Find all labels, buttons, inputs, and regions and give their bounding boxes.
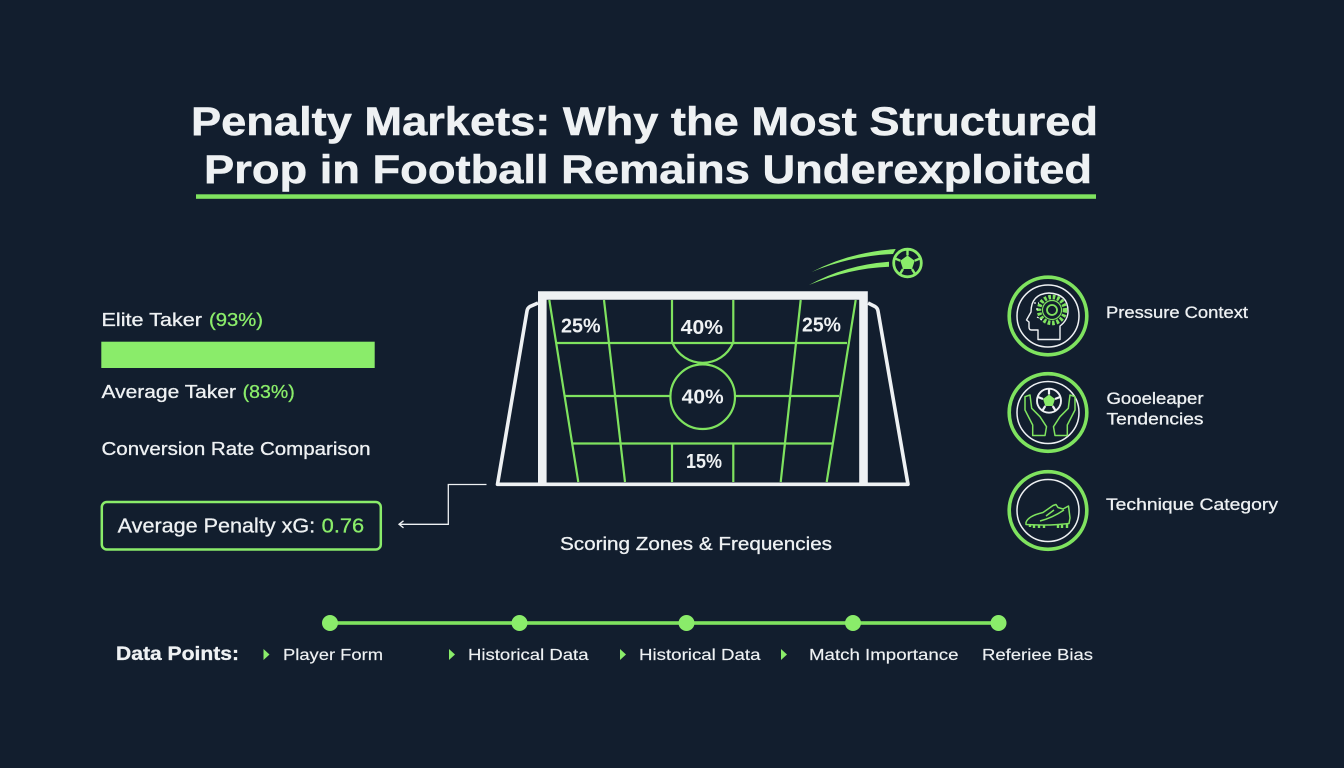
average taker label: (83%) — [243, 382, 295, 402]
label: goalkeeper tendencies — [1106, 389, 1204, 428]
label: goalkeeper tendencies: Gooeleaper — [1106, 389, 1204, 408]
goal frame — [498, 296, 908, 486]
scoring zones caption: Scoring Zones & Frequencies — [560, 534, 832, 554]
elite conversion bar — [101, 342, 375, 368]
zone percentages: 40% — [681, 317, 723, 339]
arrow: goal to xG callout — [399, 484, 486, 528]
data point labels: Historical Data — [468, 647, 589, 664]
label: technique category: Technique Category — [1106, 495, 1279, 514]
elite taker label — [102, 310, 263, 330]
factor: technique category — [1009, 472, 1279, 549]
timeline: data points — [116, 615, 1093, 665]
callout: average penalty xG — [102, 502, 381, 550]
elite taker label: Elite Taker — [102, 310, 202, 330]
average taker label: Average Taker — [102, 382, 236, 402]
factor: pressure context — [1009, 277, 1248, 355]
zone percentages: 25% — [802, 315, 841, 337]
elite taker label: (93%) — [209, 310, 263, 330]
title: Penalty Markets: Why the Most Structured — [191, 100, 1098, 144]
timeline line and nodes — [322, 615, 1006, 631]
icon: hands holding ball — [1009, 374, 1087, 451]
label: goalkeeper tendencies: Tendencies — [1106, 410, 1204, 428]
data point labels: Referiee Bias — [982, 647, 1093, 664]
panel: conversion rate comparison — [101, 310, 375, 459]
data point labels — [264, 647, 1093, 664]
zone percentages: 40% — [682, 386, 724, 408]
title — [191, 100, 1098, 199]
data points heading: Data Points: — [116, 644, 239, 665]
data point labels: Match Importance — [809, 647, 959, 664]
zone percentages: 15% — [686, 451, 722, 473]
zone grid lines — [549, 300, 856, 482]
zone percentages — [561, 315, 841, 473]
data point labels: Player Form — [283, 647, 383, 664]
average taker label — [102, 382, 295, 402]
data point labels: Historical Data — [639, 647, 761, 664]
factor: goalkeeper tendencies — [1009, 374, 1204, 451]
conversion rate caption: Conversion Rate Comparison — [102, 439, 370, 459]
label: pressure context: Pressure Context — [1106, 303, 1248, 322]
zone percentages: 25% — [561, 315, 601, 337]
callout: average penalty xG: Average Penalty xG: — [118, 516, 315, 538]
callout: average penalty xG: 0.76 — [322, 516, 364, 538]
icon: flying football — [809, 249, 921, 285]
goal diagram with scoring zones — [498, 296, 908, 486]
title: Prop in Football Remains Underexploited — [204, 148, 1092, 192]
icon: football boot — [1009, 472, 1087, 549]
icon: head with gear — [1009, 277, 1087, 355]
